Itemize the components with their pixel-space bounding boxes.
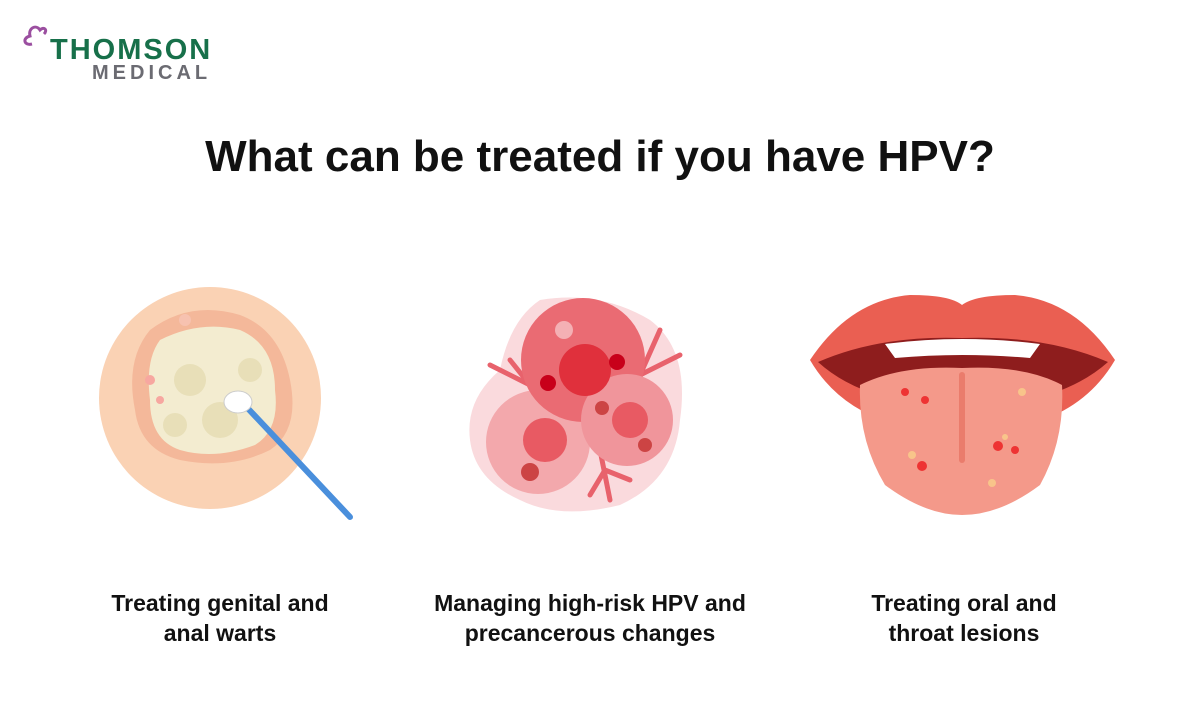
icon: mouth with tongue xyxy=(810,295,1115,515)
caption: oral xyxy=(871,590,1057,646)
caption: warts: anal warts xyxy=(164,620,276,646)
icon: butterfly xyxy=(23,26,48,46)
logo xyxy=(23,26,212,84)
caption: oral: throat lesions xyxy=(889,620,1039,646)
title: What can be treated if you have HPV? xyxy=(205,132,995,181)
caption: oral: Treating oral and xyxy=(871,590,1057,616)
logo: MEDICAL xyxy=(92,62,211,84)
caption: high-risk xyxy=(434,590,746,646)
caption: warts xyxy=(111,590,329,646)
caption: warts: Treating genital and xyxy=(111,590,329,616)
caption: high-risk: Managing high-risk HPV and xyxy=(434,590,746,616)
icon: warts with swab xyxy=(99,287,353,520)
logo text: THOMSON xyxy=(50,34,212,66)
caption: high-risk: precancerous changes xyxy=(465,620,715,646)
icon: precancerous cells xyxy=(470,298,682,512)
